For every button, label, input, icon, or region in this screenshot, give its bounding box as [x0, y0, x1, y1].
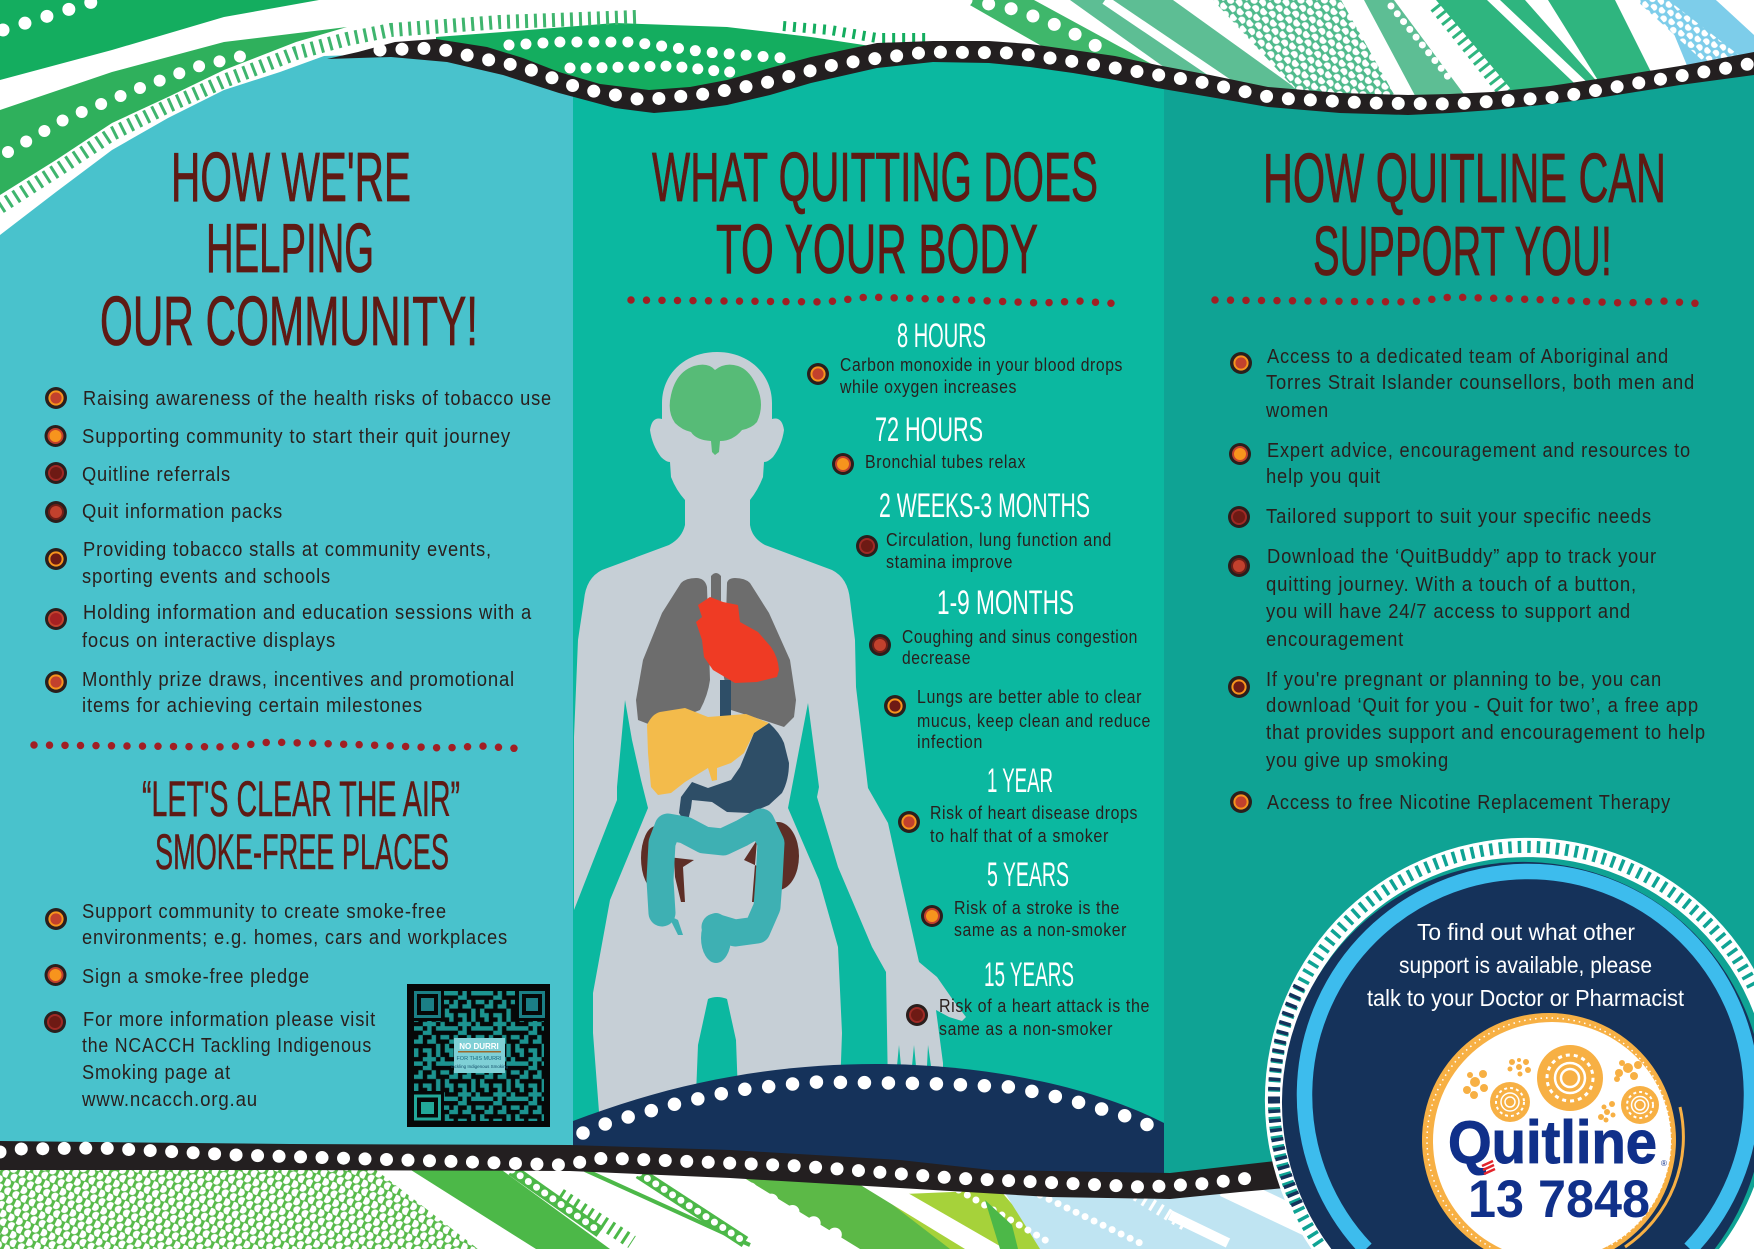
- list: quitline support items: Torres Strait Islander counsellors, both men and: [1266, 372, 1695, 394]
- navy dotted arc: [573, 1064, 1164, 1180]
- list: community help items: items for achieving certain milestones: [82, 695, 423, 717]
- timeline: 72 hours: [832, 411, 1026, 475]
- timeline: 1 to 9 months: 1-9 MONTHS: [937, 584, 1074, 622]
- list: smoke-free items: [44, 901, 508, 1111]
- quitline logo: 13 7848: [1468, 1170, 1650, 1229]
- heading: what quitting does to your body: TO YOUR BODY: [716, 210, 1038, 288]
- callout text: support is available, please: [1399, 952, 1652, 978]
- list: smoke-free items: Sign a smoke-free pledge: [82, 966, 310, 988]
- artwork: top right diagonal stripes: [961, 0, 1754, 105]
- timeline: 8 hours: 8 HOURS: [897, 317, 986, 355]
- panel: how quitline can support (right): [1164, 72, 1754, 1185]
- list: smoke-free items: Smoking page at: [82, 1062, 231, 1084]
- list: quitline support items: women: [1265, 400, 1329, 422]
- timeline: 8 hours: while oxygen increases: [839, 376, 1017, 397]
- illustration: human body with organs: [574, 352, 966, 1125]
- list: community help items: Quit information packs: [82, 501, 283, 523]
- navy disc with blue ring: [1282, 862, 1754, 1249]
- timeline: 1 to 9 months: infection: [917, 731, 983, 752]
- timeline: 72 hours: 72 HOURS: [875, 411, 983, 449]
- list: quitline support items: help you quit: [1266, 466, 1381, 488]
- badge: circular quitline callout: [1265, 838, 1754, 1249]
- quitline logo: [1422, 1013, 1683, 1249]
- timeline: 1 to 9 months: mucus, keep clean and reduce: [917, 710, 1151, 731]
- list: community help items: Supporting community to start their quit journey: [82, 426, 511, 448]
- artwork: bottom strip: [0, 1160, 1345, 1249]
- timeline: 1 year: 1 YEAR: [987, 762, 1053, 800]
- timeline: 5 years: same as a non-smoker: [954, 919, 1127, 940]
- subheading: let's clear the air smoke-free places: [142, 771, 460, 880]
- timeline: 1 to 9 months: decrease: [902, 647, 971, 668]
- list: smoke-free items: the NCACCH Tackling Indigenous: [82, 1035, 372, 1057]
- timeline: 5 years: [921, 856, 1127, 940]
- timeline: 15 years: [906, 956, 1150, 1039]
- list: quitline support items: download ‘Quit for you - Quit for two’, a free app: [1266, 695, 1699, 717]
- divider: middle red dots: [631, 297, 1122, 304]
- divider: right red dots: [1215, 297, 1705, 304]
- list: community help items: [44, 387, 552, 717]
- kidneys: [641, 822, 799, 902]
- heading: what quitting does to your body: [652, 138, 1098, 288]
- stomach: [679, 723, 789, 825]
- heading: how quitline can support you: [1263, 139, 1666, 290]
- timeline: 15 years: same as a non-smoker: [939, 1018, 1113, 1039]
- list: quitline support items: encouragement: [1266, 629, 1404, 651]
- timeline: 1 year: [898, 762, 1138, 846]
- timeline: 5 years: Risk of a stroke is the: [954, 897, 1120, 918]
- callout text: To find out what other: [1417, 919, 1635, 945]
- heading: how we're helping our community: [100, 138, 478, 360]
- qr code: Tackling Indigenous Smoking: [450, 1064, 509, 1069]
- band: top dotted black wave: [327, 39, 1754, 115]
- timeline: 1 year: to half that of a smoker: [930, 825, 1109, 846]
- list: community help items: Quitline referrals: [82, 464, 231, 486]
- artwork: top left green swooshes: [0, 0, 927, 207]
- timeline: 5 years: 5 YEARS: [987, 856, 1069, 894]
- timeline: 1 to 9 months: [869, 584, 1151, 752]
- quitline logo: Quitline: [1448, 1109, 1657, 1176]
- subheading: let's clear the air smoke-free places: “LET'S CLEAR THE AIR”: [142, 771, 460, 827]
- timeline: 2 weeks to 3 months: 2 WEEKS-3 MONTHS: [879, 487, 1090, 525]
- colon: [660, 822, 771, 963]
- list: quitline support items: Expert advice, encouragement and resources to: [1267, 440, 1691, 462]
- list: quitline support items: Tailored support to suit your specific needs: [1266, 506, 1652, 528]
- callout text: [1367, 919, 1685, 1011]
- esophagus: [720, 680, 731, 717]
- heading: what quitting does to your body: WHAT QUITTING DOES: [652, 138, 1098, 216]
- timeline: 15 years: Risk of a heart attack is the: [939, 995, 1150, 1016]
- panel: how we're helping (left): [0, 54, 574, 1155]
- list: smoke-free items: For more information please visit: [83, 1009, 376, 1031]
- list: quitline support items: Download the ‘QuitBuddy” app to track your: [1267, 546, 1657, 568]
- timeline: 1 to 9 months: Lungs are better able to clear: [917, 686, 1142, 707]
- outer hatched ring: [1265, 838, 1754, 1249]
- list: community help items: Providing tobacco stalls at community events,: [83, 539, 492, 561]
- list: quitline support items: you will have 24/7 access to support and: [1266, 601, 1631, 623]
- qr code: FOR THIS MURRI: [456, 1056, 502, 1062]
- body silhouette: [574, 352, 966, 1125]
- subheading: let's clear the air smoke-free places: SMOKE-FREE PLACES: [155, 824, 449, 880]
- liver: [647, 708, 769, 795]
- callout text: talk to your Doctor or Pharmacist: [1367, 985, 1685, 1011]
- list: quitline support items: that provides support and encouragement to help: [1266, 722, 1706, 744]
- panel: what quitting does (middle): [573, 59, 1164, 1185]
- timeline: 8 hours: Carbon monoxide in your blood drops: [840, 354, 1123, 375]
- brain: [670, 365, 761, 455]
- divider: left red dots: [34, 742, 524, 749]
- list: quitline support items: quitting journey. With a touch of a button,: [1266, 574, 1637, 596]
- qr code: NO DURRI: [459, 1042, 499, 1051]
- quitline logo: ®: [1661, 1159, 1667, 1168]
- list: quitline support items: If you're pregnant or planning to be, you can: [1266, 669, 1662, 691]
- list: community help items: Monthly prize draws, incentives and promotional: [82, 669, 515, 691]
- list: smoke-free items: environments; e.g. homes, cars and workplaces: [82, 927, 508, 949]
- heading: how we're helping our community: HELPING: [206, 209, 374, 287]
- timeline: 2 weeks to 3 months: [856, 487, 1112, 572]
- band: bottom dotted black wave: [0, 1141, 1285, 1199]
- timeline: 2 weeks to 3 months: Circulation, lung function and: [886, 529, 1112, 550]
- list: quitline support items: [1228, 346, 1706, 814]
- gaps between arms, torso and legs: [574, 700, 931, 1125]
- list: community help items: focus on interactive displays: [82, 630, 336, 652]
- list: community help items: Raising awareness of the health risks of tobacco use: [83, 388, 552, 410]
- list: smoke-free items: www.ncacch.org.au: [81, 1089, 258, 1111]
- timeline: 2 weeks to 3 months: stamina improve: [886, 551, 1013, 572]
- list: community help items: sporting events and schools: [82, 566, 331, 588]
- list: smoke-free items: Support community to create smoke-free: [82, 901, 447, 923]
- list: quitline support items: Access to free Nicotine Replacement Therapy: [1267, 792, 1671, 814]
- lungs and trachea: [636, 573, 796, 727]
- timeline: 15 years: 15 YEARS: [984, 956, 1074, 994]
- timeline: 1 year: Risk of heart disease drops: [930, 802, 1138, 823]
- list: community help items: Holding information and education sessions with a: [83, 602, 532, 624]
- heading: how we're helping our community: OUR COMMUNITY!: [100, 282, 478, 360]
- timeline: 1 to 9 months: Coughing and sinus congestion: [902, 626, 1138, 647]
- heart: [696, 597, 779, 683]
- list: quitline support items: you give up smoking: [1266, 750, 1449, 772]
- timeline: 72 hours: Bronchial tubes relax: [865, 451, 1026, 472]
- qr code: [407, 984, 550, 1127]
- list: quitline support items: Access to a dedicated team of Aboriginal and: [1267, 346, 1669, 368]
- timeline: 8 hours: [807, 317, 1123, 397]
- heading: how we're helping our community: HOW WE'RE: [171, 138, 411, 216]
